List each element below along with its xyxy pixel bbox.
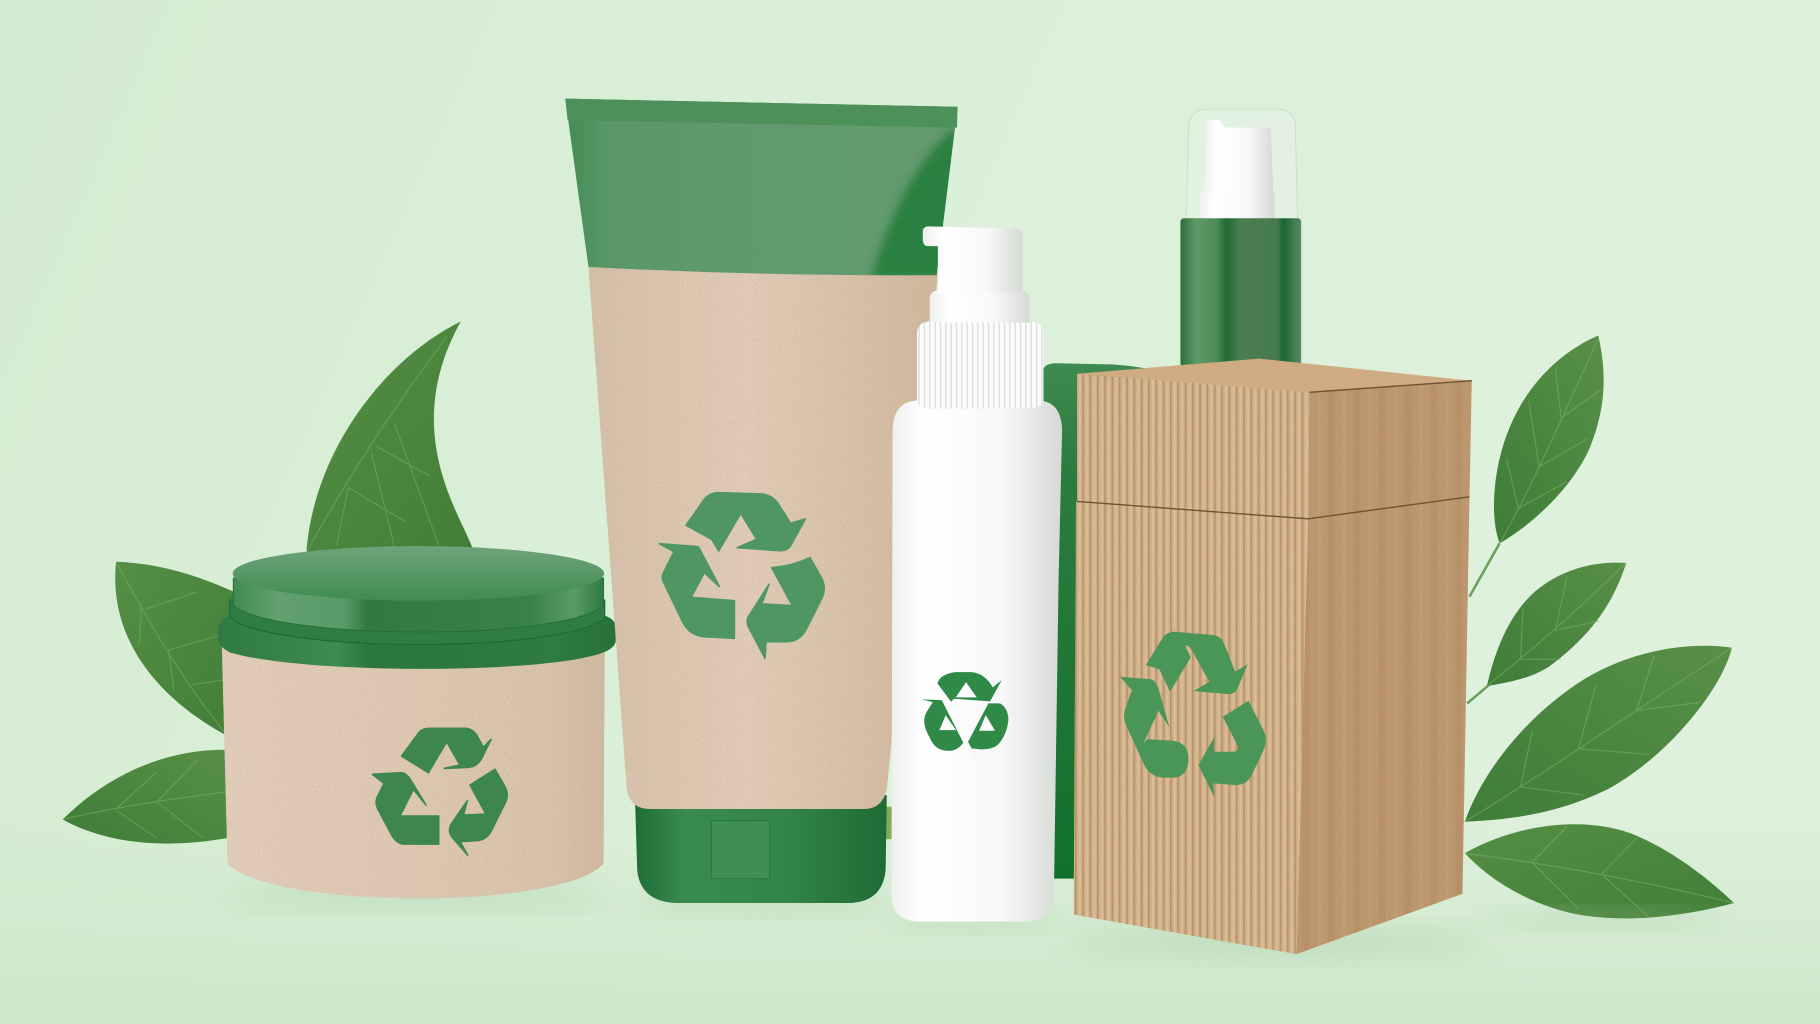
tube [565,99,963,903]
tube dark corner [871,125,963,279]
leaf: tall back leaf [306,322,472,553]
leaf: middle right [1487,563,1626,686]
leaf: lower left leaf [63,750,227,844]
box front face [1074,501,1308,954]
tube kraft body [588,267,938,809]
lid right face [1308,381,1472,519]
leaf: top right [1494,335,1604,543]
jar green lid [218,546,616,669]
tube screw cap [635,795,887,903]
leaf: middle left leaf [115,562,234,736]
lid front face [1077,374,1309,519]
jar [218,546,616,898]
ground shadows [226,887,1724,954]
white bottle recycling icon [922,672,1008,760]
back pump bottle [1180,109,1301,367]
leaf: large right [1465,646,1732,822]
leaf stems [1467,543,1500,703]
tube crimp [565,99,958,128]
leaf: low right [1465,824,1734,918]
back green carton [884,363,1149,879]
clear dome cap [1186,109,1298,221]
lid ring [230,600,605,644]
lid top disc [233,546,604,601]
kraft box [1074,359,1472,954]
white pump [1199,120,1274,221]
right leaves [1465,335,1734,918]
box right face [1297,497,1469,954]
jar kraft body [222,641,605,898]
ribbed collar [917,322,1043,409]
lid top face [1077,359,1472,392]
lid side wall [233,578,604,632]
left leaves [63,322,472,844]
jar recycling icon [373,728,507,855]
lid lower rim [218,615,616,669]
tube recycling icon [659,493,824,658]
white bottle body [891,400,1062,922]
green bottle body [1180,218,1301,367]
lid seam [1077,381,1472,519]
white pump bottle [891,226,1062,922]
box recycling icon [1120,632,1266,797]
pump neck and head [923,226,1030,323]
tube green top [565,99,963,279]
